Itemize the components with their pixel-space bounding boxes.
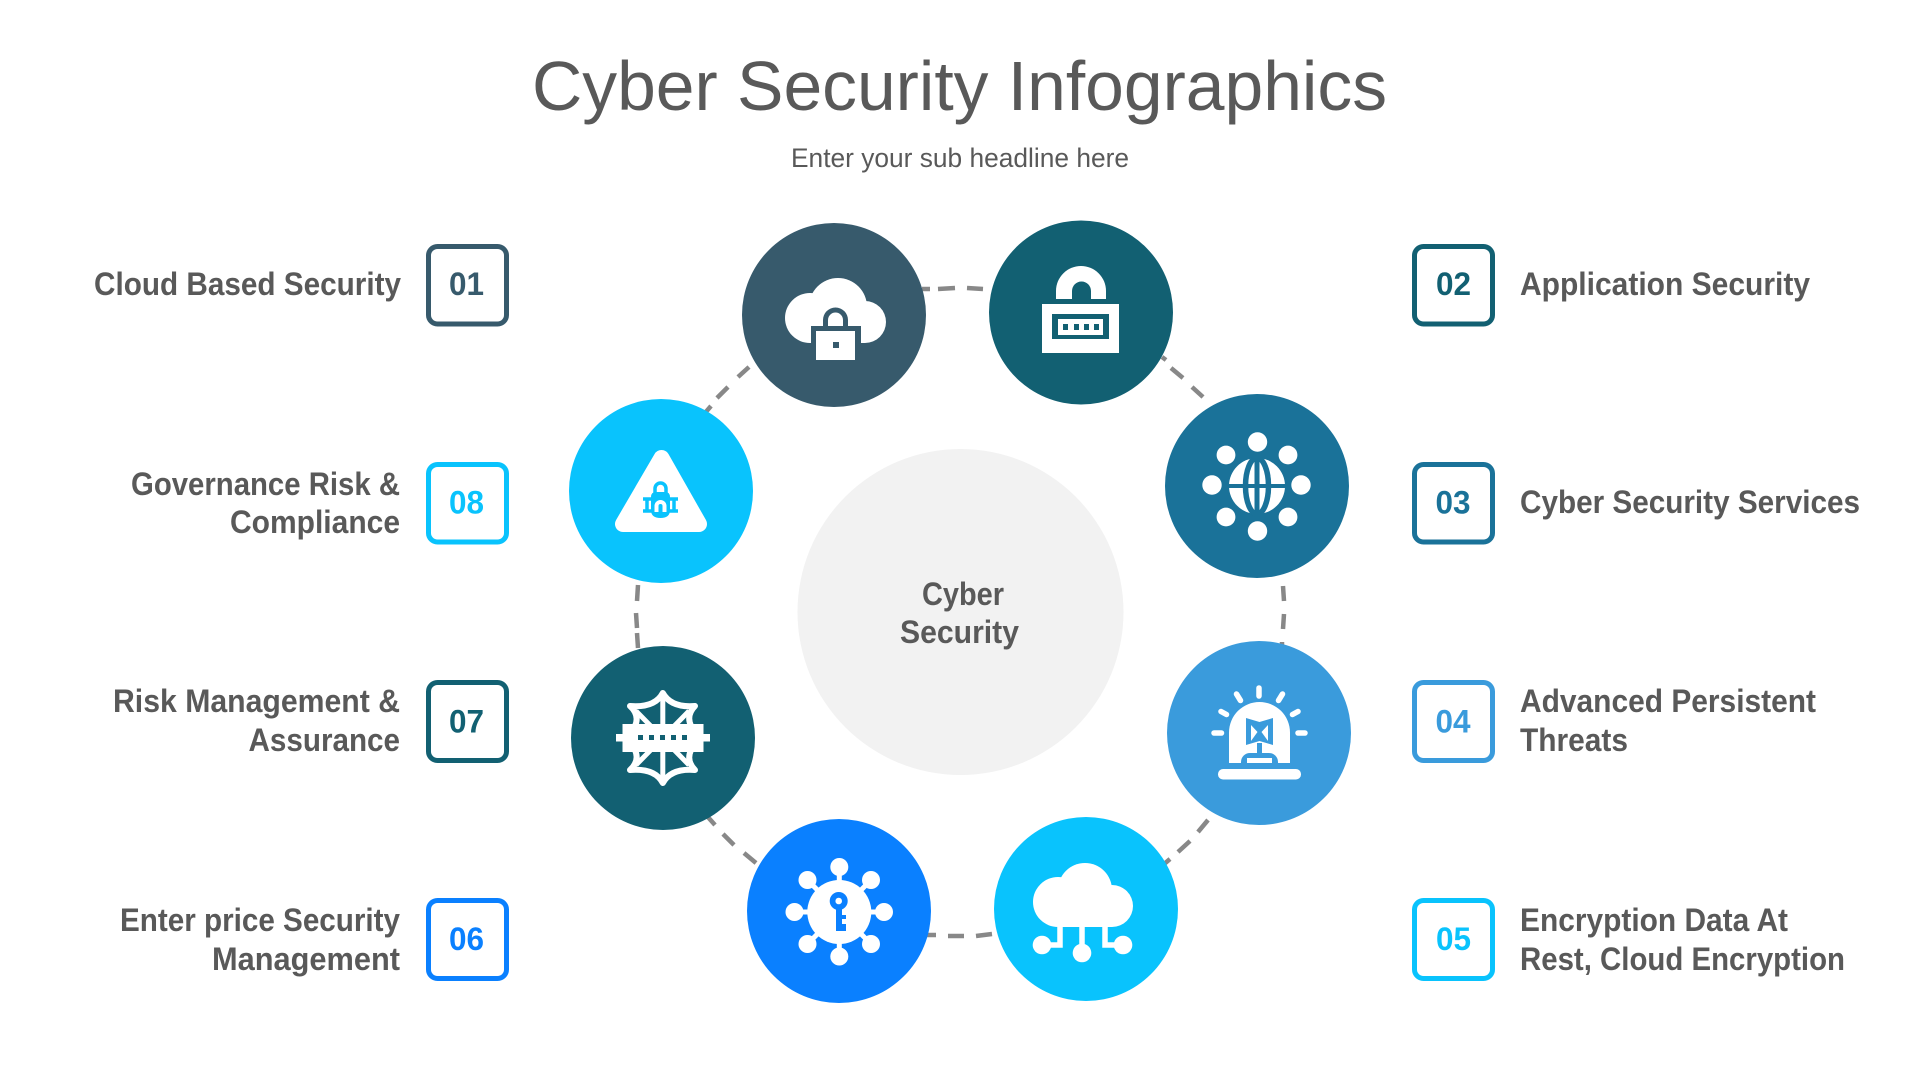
item 01: Cloud Based Security: Cloud Based Security [94, 266, 401, 302]
item 08: Governance Risk and Compliance: Compliance [230, 504, 400, 540]
icon circle 07: web firewall [571, 646, 755, 830]
item 06: Enter price Security Management [120, 900, 506, 978]
item 01: Cloud Based Security: 01 [449, 266, 484, 302]
item 06: Enter price Security Management: Enter price Security [120, 902, 400, 938]
item 06: Enter price Security Management: Management [212, 941, 400, 977]
center circle [798, 449, 1124, 775]
icon circle 08: warning bug lock [569, 399, 753, 583]
item 07: Risk Management and Assurance [113, 682, 506, 760]
item 07: Risk Management and Assurance: Risk Management & [113, 683, 400, 719]
item 04: Advanced Persistent Threats: Threats [1520, 722, 1628, 758]
item 04: Advanced Persistent Threats [1414, 682, 1816, 760]
item 02: Application Security: Application Security [1520, 266, 1810, 302]
icon circle 03: globe network [1165, 394, 1349, 578]
icon circle 05: cloud network [994, 817, 1178, 1001]
subtitle: Enter your sub headline here [791, 143, 1129, 173]
item 07: Risk Management and Assurance: 07 [449, 704, 484, 740]
item 08: Governance Risk and Compliance: 08 [449, 484, 484, 520]
item 06: Enter price Security Management: 06 [449, 921, 484, 957]
title: Cyber Security Infographics [532, 47, 1387, 125]
item 07: Risk Management and Assurance: Assurance [248, 722, 400, 758]
center circle: Cyber [922, 576, 1004, 612]
item 08: Governance Risk and Compliance: Governance Risk & [131, 466, 400, 502]
item 04: Advanced Persistent Threats: 04 [1436, 704, 1471, 740]
item 02: Application Security: 02 [1436, 266, 1471, 302]
item 05: Encryption Data At Rest, Cloud Encryption: Rest, Cloud Encryption [1520, 941, 1845, 977]
item 03: Cyber Security Services [1414, 464, 1860, 542]
icon circle 01: cloud lock [742, 223, 926, 407]
item 08: Governance Risk and Compliance [131, 464, 506, 542]
item 04: Advanced Persistent Threats: Advanced Persistent [1520, 683, 1816, 719]
dashed ring connecting the icons [636, 288, 1284, 936]
item 01: Cloud Based Security [94, 246, 506, 324]
icon circle 04: alarm siren [1167, 641, 1351, 825]
item 05: Encryption Data At Rest, Cloud Encryption: 05 [1436, 921, 1471, 957]
icon circle 06: key network [747, 819, 931, 1003]
item 03: Cyber Security Services: 03 [1436, 484, 1470, 520]
center circle: Security [900, 614, 1019, 650]
item 05: Encryption Data At Rest, Cloud Encryption: Encryption Data At [1520, 902, 1788, 938]
item 05: Encryption Data At Rest, Cloud Encryption [1414, 900, 1845, 978]
item 02: Application Security [1414, 246, 1810, 324]
item 03: Cyber Security Services: Cyber Security Services [1520, 484, 1860, 520]
icon circle 02: password lock [989, 220, 1173, 404]
